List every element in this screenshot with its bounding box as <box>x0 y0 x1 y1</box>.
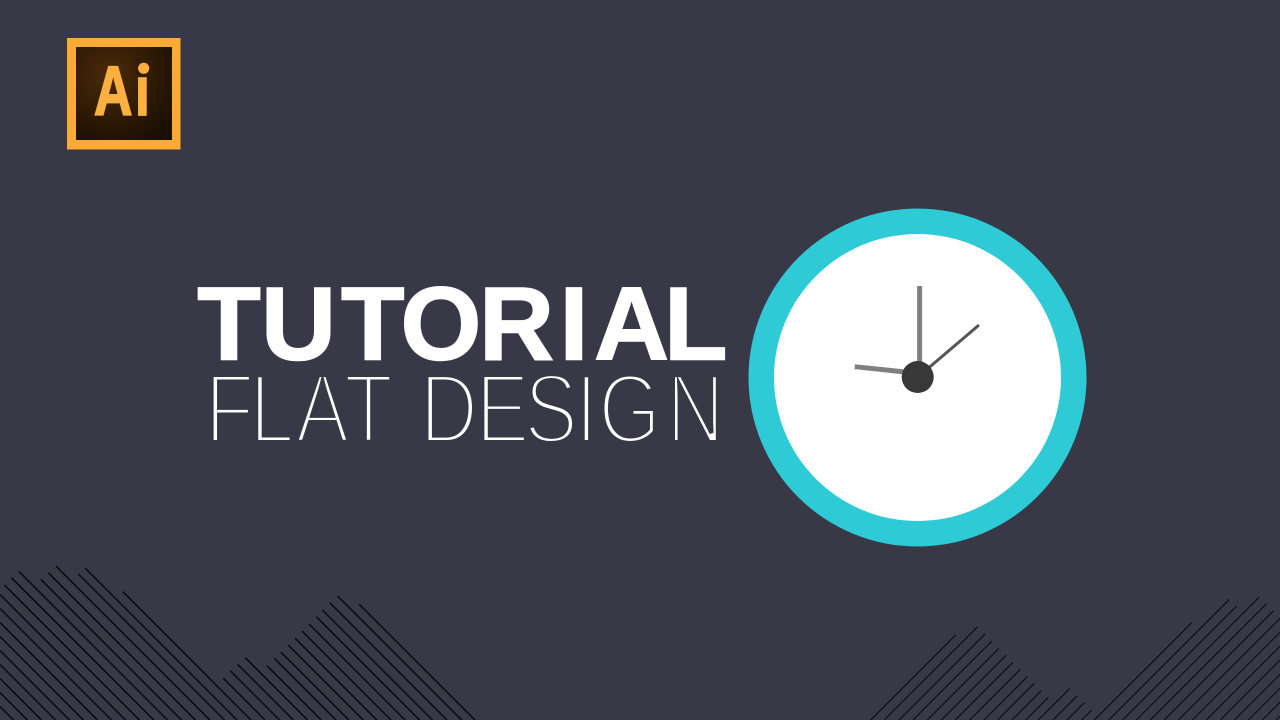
icon: Adobe Illustrator logo: Ai <box>94 53 150 131</box>
decorative hatched mountains bottom right <box>871 597 1280 720</box>
icon: Adobe Illustrator logo <box>67 38 180 150</box>
title: TUTORIAL: TUTORIAL <box>197 266 728 382</box>
decorative hatched mountains bottom left <box>0 566 475 720</box>
hour hand <box>855 367 905 372</box>
icon: flat clock <box>748 208 1086 546</box>
minute hand <box>917 286 922 372</box>
clock face <box>774 234 1061 521</box>
subtitle: FLAT DESIGN: FLAT DESIGN <box>205 354 724 463</box>
clock rim <box>748 208 1086 546</box>
second hand <box>925 325 979 371</box>
clock hub <box>902 361 934 393</box>
